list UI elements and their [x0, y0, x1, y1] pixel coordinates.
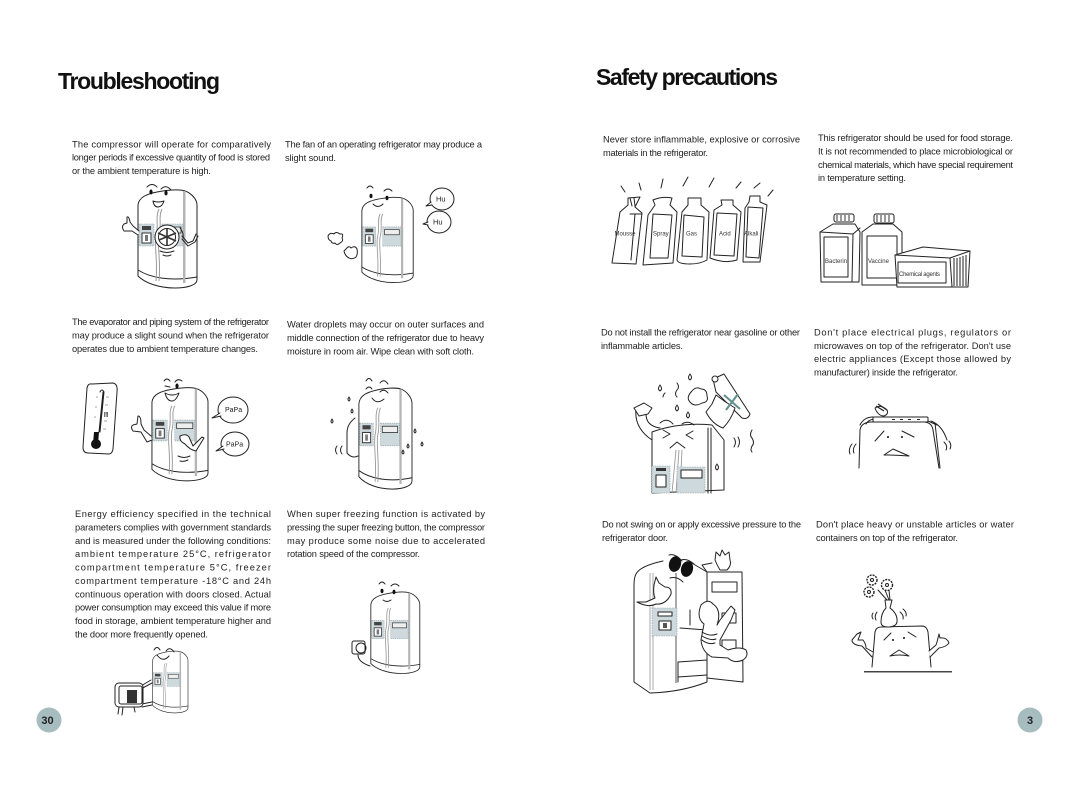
panel: compressor note	[72, 140, 271, 288]
text: super freezing: rotation speed of the compressor.	[287, 549, 420, 559]
title: Troubleshooting: Troubleshooting	[58, 68, 220, 94]
text: fan sound: slight sound.	[285, 153, 336, 163]
icon: fridge with fan	[122, 184, 198, 288]
text: door pressure: Do not swing on or apply excessive pressure to the	[602, 520, 801, 530]
text: evaporator	[72, 317, 269, 354]
text: evaporator: may produce a slight sound when the refrigerator	[72, 330, 269, 340]
bottle: Acid	[710, 200, 741, 262]
text: electrical plugs: microwaves on top of the refrigerator. Don't use	[814, 341, 1011, 351]
icon: fridge with power strip	[849, 404, 951, 468]
icon: child swinging on door	[634, 550, 747, 693]
text: energy efficiency: continuous operation with doors closed. Actual	[75, 590, 271, 600]
icon: thermometer	[83, 383, 117, 454]
bubble: Hu: Hu	[433, 218, 443, 226]
text: energy efficiency: ambient temperature 25°C, refrigerator	[75, 549, 271, 559]
text: energy efficiency: parameters complies with government standards	[75, 522, 271, 532]
text: fan sound	[285, 140, 483, 163]
badge: page 30: 30	[41, 715, 54, 727]
icon: thermometer: |||	[104, 412, 109, 418]
text: food storage: in temperature setting.	[818, 173, 906, 183]
panel: evaporator note	[72, 317, 269, 481]
text: electrical plugs: electric appliances (Except those allowed by	[814, 354, 1011, 364]
bottle: Mousse: Mousse	[614, 232, 636, 238]
text: energy efficiency: the door more frequently opened.	[75, 630, 208, 640]
text: heavy articles	[816, 520, 1014, 543]
text: water droplets: middle connection of the refrigerator due to heavy	[287, 333, 484, 343]
icon: bottles and box	[820, 214, 970, 287]
bottle: Spray: Spray	[653, 232, 669, 238]
panel: super freezing note	[287, 509, 485, 673]
text: food storage: It is not recommended to place microbiological or	[818, 146, 1013, 156]
text: evaporator: operates due to ambient temperature changes.	[72, 344, 258, 354]
badge: page 30	[36, 708, 62, 732]
icon: fridge with plug	[352, 582, 420, 673]
text: gasoline	[601, 328, 800, 351]
text: gasoline: inflammable articles.	[601, 341, 683, 351]
text: heavy articles: Don't place heavy or unstable articles or water	[816, 520, 1014, 530]
text: energy efficiency: Energy efficiency specified in the technical	[75, 509, 271, 519]
text: electrical plugs: Don't place electrical plugs, regulators or	[814, 328, 1011, 338]
icon: row of bottles	[612, 177, 773, 265]
icon: fridge with power meter	[115, 648, 188, 715]
panel: door pressure note	[602, 520, 801, 693]
text: water droplets	[287, 320, 484, 356]
title: Safety precautions: Safety precautions	[596, 64, 778, 90]
bubble: PaPa: PaPa	[225, 407, 242, 414]
bottle: Vaccine: Vaccine	[868, 259, 890, 265]
text: compressor: or the ambient temperature is high.	[72, 166, 211, 176]
text: water droplets: moisture in room air. Wipe clean with soft cloth.	[287, 346, 474, 356]
text: heavy articles: containers on top of the refrigerator.	[816, 533, 958, 543]
text: energy efficiency	[75, 509, 271, 640]
panel: food storage only note	[818, 133, 1013, 287]
icon: fridge PaPa	[132, 379, 249, 481]
text: food storage	[818, 133, 1013, 183]
panel: gasoline note	[601, 328, 800, 493]
text: never store: Never store inflammable, explosive or corrosive	[603, 134, 800, 144]
text: energy efficiency: and is measured under the following conditions:	[75, 536, 271, 546]
bubble: PaPa: PaPa	[226, 442, 243, 448]
bottle: Gas	[677, 198, 709, 264]
text: super freezing: pressing the super freezing button, the compressor	[287, 522, 485, 532]
badge: page 3	[1018, 708, 1042, 732]
bottle: Bacterin	[820, 214, 860, 282]
icon: panicking fridge with spray	[634, 374, 754, 493]
bottle: Alkali	[743, 196, 767, 262]
bottle: Spray	[643, 197, 677, 265]
text: gasoline: Do not install the refrigerator near gasoline or other	[601, 328, 800, 338]
bubble: Hu: Hu	[436, 194, 446, 204]
text: energy efficiency: compartment temperature -18°C and 24h	[75, 576, 271, 586]
text: energy efficiency: food in storage, ambient temperature higher and	[75, 616, 271, 626]
icon: sweating fridge	[331, 378, 423, 489]
text: compressor	[72, 140, 271, 176]
icon: fridge with vase	[852, 575, 952, 672]
panel: heavy articles note	[816, 520, 1014, 672]
box: Chemical agents	[895, 247, 970, 287]
panel: water droplets note	[287, 320, 484, 489]
text: super freezing: may produce some noise due to accelerated	[287, 536, 485, 546]
icon: fridge with Hu bubbles	[328, 186, 454, 283]
panel: electrical plugs note	[814, 328, 1011, 468]
text: compressor: The compressor will operate for comparatively	[72, 140, 271, 150]
text: door pressure	[602, 520, 801, 543]
panel: energy efficiency note	[75, 509, 271, 715]
bottle: Gas: Gas	[686, 232, 697, 238]
bottle: Alkali: Alkali	[744, 232, 758, 238]
panel: inflammable storage note	[603, 134, 800, 265]
text: never store: materials in the refrigerator.	[603, 148, 708, 158]
text: electrical plugs: manufacturer) inside the refrigerator.	[814, 368, 958, 378]
text: evaporator: The evaporator and piping system of the refrigerator	[72, 317, 269, 327]
bottle: Bacterin: Bacterin	[825, 259, 847, 265]
bottle: Mousse	[612, 197, 642, 264]
text: energy efficiency: power consumption may exceed this value if more	[75, 602, 271, 612]
text: food storage: This refrigerator should be used for food storage.	[818, 133, 1013, 143]
badge: page 3: 3	[1027, 715, 1033, 727]
bottle: Acid: Acid	[719, 232, 731, 238]
text: electrical plugs	[814, 328, 1011, 378]
text: super freezing	[287, 509, 485, 559]
bottle: Vaccine	[862, 214, 902, 285]
text: compressor: longer periods if excessive quantity of food is stored	[72, 152, 270, 162]
text: food storage: chemical materials, which have special requirement	[818, 160, 1013, 170]
text: energy efficiency: compartment temperature 5°C, freezer	[75, 562, 271, 572]
text: never store	[603, 134, 800, 158]
box: Chemical agents: Chemical agents	[899, 272, 940, 278]
text: door pressure: refrigerator door.	[602, 533, 668, 543]
text: fan sound: The fan of an operating refrigerator may produce a	[285, 140, 483, 150]
text: water droplets: Water droplets may occur on outer surfaces and	[287, 320, 484, 330]
panel: fan sound note	[285, 140, 483, 283]
text: super freezing: When super freezing function is activated by	[287, 509, 485, 519]
